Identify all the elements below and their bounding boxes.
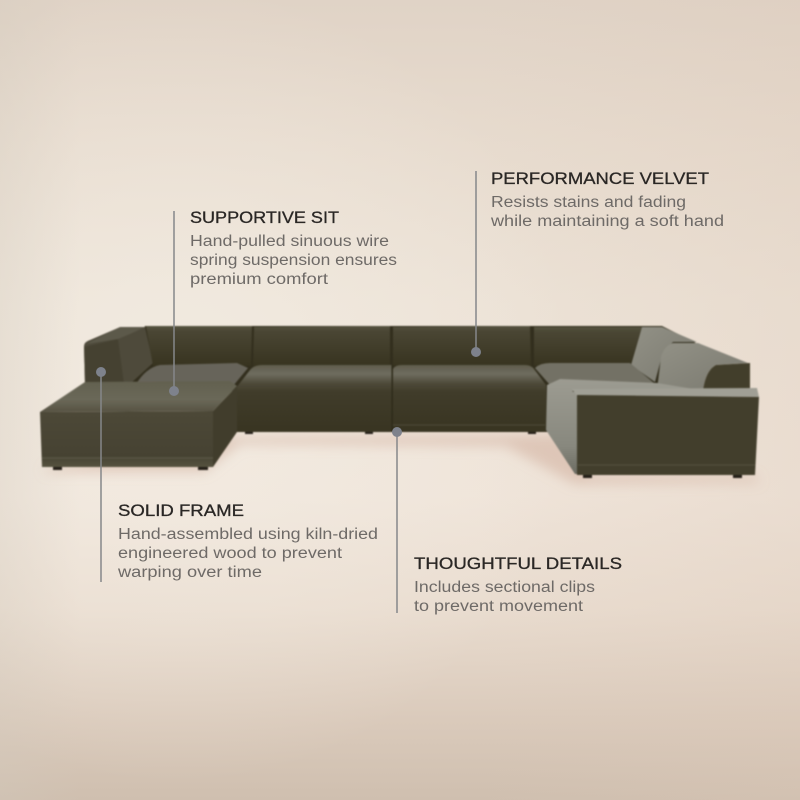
sofa base silhouette <box>125 326 700 432</box>
callout: thoughtful details: THOUGHTFUL DETAILS <box>414 554 622 573</box>
left arm module <box>84 327 153 384</box>
seat seam <box>391 365 393 432</box>
right corner light panel <box>631 327 697 382</box>
callout: supportive sit: SUPPORTIVE SIT <box>190 208 339 227</box>
callout: solid frame: Hand-assembled using kiln-dried <box>118 526 378 543</box>
right arm top <box>657 343 748 390</box>
callout: solid frame: SOLID FRAME <box>118 501 244 520</box>
sofa feet <box>53 432 742 478</box>
callout: performance velvet: while maintaining a soft hand <box>490 213 724 230</box>
callout: thoughtful details: Includes sectional clips <box>414 579 595 596</box>
back cushion 4 <box>534 327 642 366</box>
center-right seat <box>393 365 546 432</box>
callout: solid frame <box>96 367 378 582</box>
callout: supportive sit <box>169 208 397 396</box>
callout: thoughtful details <box>392 427 622 615</box>
callout: supportive sit: Hand-pulled sinuous wire <box>190 233 389 250</box>
center-left seat <box>236 365 392 432</box>
callout: thoughtful details: to prevent movement <box>414 598 584 615</box>
sofa <box>40 326 759 478</box>
back cushion 1 <box>146 326 252 366</box>
callout: performance velvet: PERFORMANCE VELVET <box>491 169 709 188</box>
ottoman <box>40 381 237 467</box>
callout: solid frame: engineered wood to prevent <box>118 545 343 562</box>
left seat cushion <box>135 363 248 386</box>
callout: performance velvet <box>471 169 724 357</box>
floor shadow <box>45 434 760 484</box>
callout: solid frame: warping over time <box>117 564 262 581</box>
corner seat cushion <box>535 363 654 385</box>
right chaise <box>546 379 759 475</box>
callout: supportive sit: premium comfort <box>190 271 329 288</box>
callout: performance velvet: Resists stains and fading <box>491 194 686 211</box>
right arm end <box>703 363 750 390</box>
back cushion 3 <box>393 326 531 366</box>
callout: supportive sit: spring suspension ensures <box>190 252 397 269</box>
back cushion 2 <box>253 326 390 366</box>
